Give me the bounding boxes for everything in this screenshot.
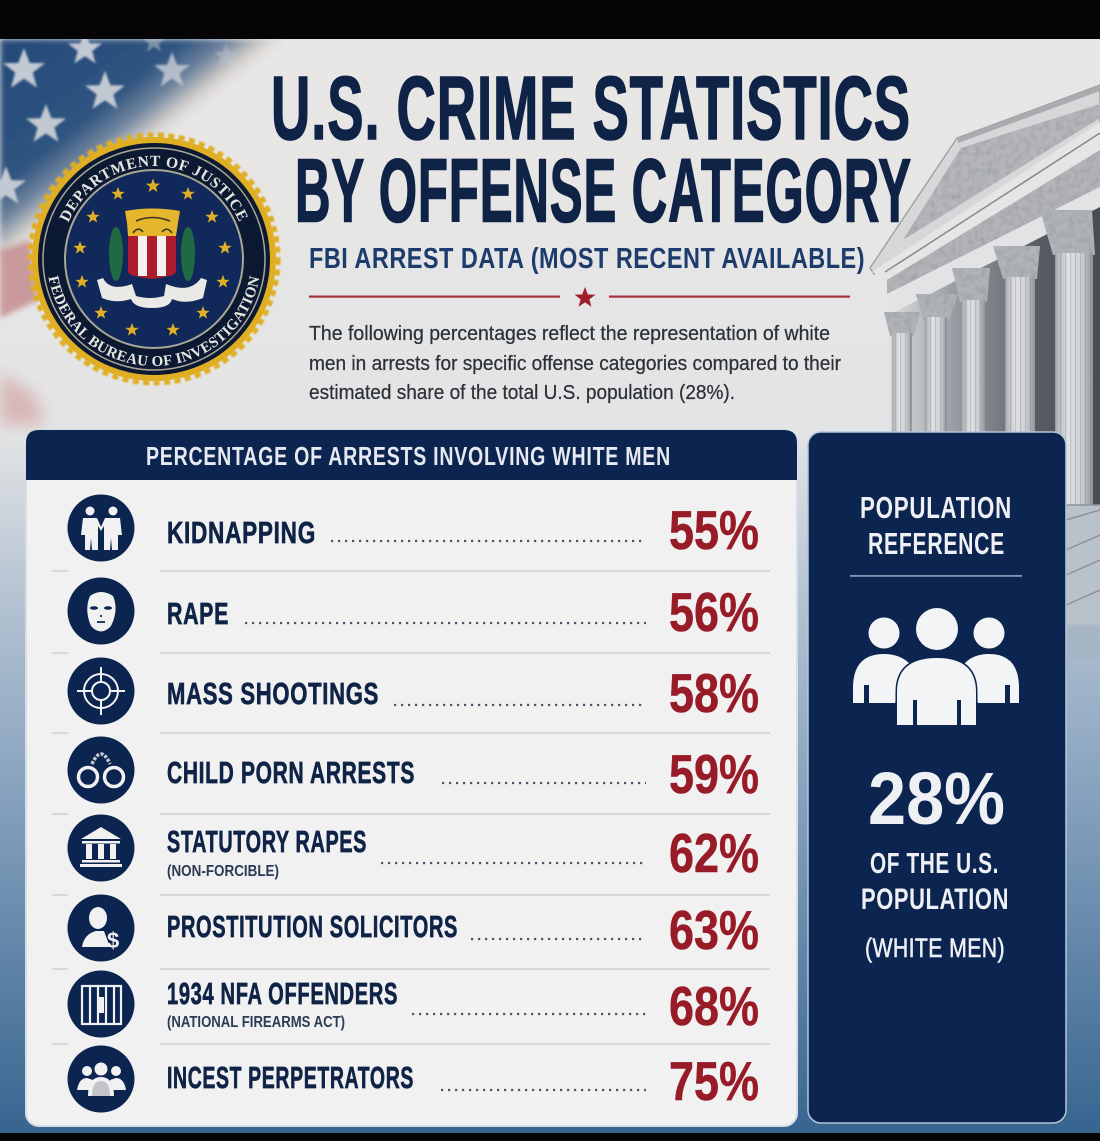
row: kidnapping: KIDNAPPING <box>167 515 316 550</box>
panel heading: POPULATION <box>860 490 1012 525</box>
row: prostitution solicitors <box>68 894 759 962</box>
steps <box>1066 505 1100 640</box>
stat caption: OF THE U.S. <box>870 848 999 880</box>
row: prostitution solicitors: PROSTITUTION SOLICITORS <box>167 909 458 944</box>
black top bar <box>0 0 1100 39</box>
row: child porn arrests <box>68 736 759 805</box>
red star divider <box>309 287 850 307</box>
FBI seal <box>26 132 282 386</box>
intro paragraph: men in arrests for specific offense categories compared to their <box>309 352 841 375</box>
icon: three people <box>853 608 1019 725</box>
building: courthouse columns <box>870 85 1100 660</box>
icon: two figures <box>68 494 134 562</box>
row: child porn arrests: 59% <box>669 743 759 805</box>
roof and pediment <box>870 85 1100 274</box>
icon: handcuffs <box>68 736 134 804</box>
row: child porn arrests: CHILD PORN ARRESTS <box>167 755 415 790</box>
row: 1934 NFA offenders: 68% <box>669 975 759 1037</box>
black bottom bar <box>0 1133 1100 1141</box>
row: rape: RAPE <box>167 596 229 631</box>
row: statutory rapes: STATUTORY RAPES <box>167 824 367 859</box>
panel header <box>26 430 797 480</box>
flag backdrop <box>0 30 320 425</box>
panel heading: REFERENCE <box>868 526 1005 561</box>
row: statutory rapes: (NON-FORCIBLE) <box>167 863 279 880</box>
FBI seal: FEDERAL BUREAU OF INVESTIGATION <box>48 275 260 366</box>
icon: masked face <box>68 578 134 644</box>
row: rape <box>68 578 759 644</box>
stat caption: POPULATION <box>861 883 1009 916</box>
intro paragraph: estimated share of the total U.S. population (28%). <box>309 381 735 404</box>
icon: person with dollar <box>68 894 134 962</box>
panel: population reference <box>808 432 1066 1123</box>
row: 1934 NFA offenders: (NATIONAL FIREARMS ACT) <box>167 1014 345 1031</box>
stat caption: (WHITE MEN) <box>865 933 1005 963</box>
row: mass shootings: 58% <box>669 662 759 724</box>
row: 1934 NFA offenders <box>68 970 759 1038</box>
building shadowed interior <box>890 195 1100 510</box>
intro paragraph <box>309 322 841 404</box>
big stat: 28% <box>868 757 1005 840</box>
FBI seal: DEPARTMENT OF JUSTICE <box>59 156 248 222</box>
intro paragraph: The following percentages reflect the representation of white <box>309 322 830 345</box>
row: rape: 56% <box>669 581 759 643</box>
icon: jail bars <box>68 970 134 1038</box>
row: incest perpetrators <box>68 1046 759 1112</box>
column capitals <box>884 210 1095 336</box>
icon: person with dollar: $ <box>107 928 119 953</box>
row: mass shootings: MASS SHOOTINGS <box>167 676 379 711</box>
icon: courthouse <box>68 814 134 882</box>
stat caption <box>861 848 1009 963</box>
title <box>271 59 912 242</box>
panel heading <box>860 490 1012 561</box>
columns <box>892 333 912 445</box>
panel header: PERCENTAGE OF ARRESTS INVOLVING WHITE MEN <box>146 441 671 471</box>
row: kidnapping: 55% <box>669 499 759 561</box>
subtitle: FBI ARREST DATA (MOST RECENT AVAILABLE) <box>309 243 865 275</box>
icon: target crosshair <box>68 658 134 724</box>
row: 1934 NFA offenders: 1934 NFA OFFENDERS <box>167 976 398 1011</box>
row: statutory rapes: 62% <box>669 822 759 884</box>
row: statutory rapes <box>68 814 759 884</box>
row: mass shootings <box>68 658 759 724</box>
row: incest perpetrators: 75% <box>669 1050 759 1112</box>
panel: arrests list <box>26 430 797 1126</box>
icon: group of people <box>68 1046 134 1112</box>
row: prostitution solicitors: 63% <box>669 899 759 961</box>
row: incest perpetrators: INCEST PERPETRATORS <box>167 1060 414 1095</box>
row: kidnapping <box>68 494 759 562</box>
